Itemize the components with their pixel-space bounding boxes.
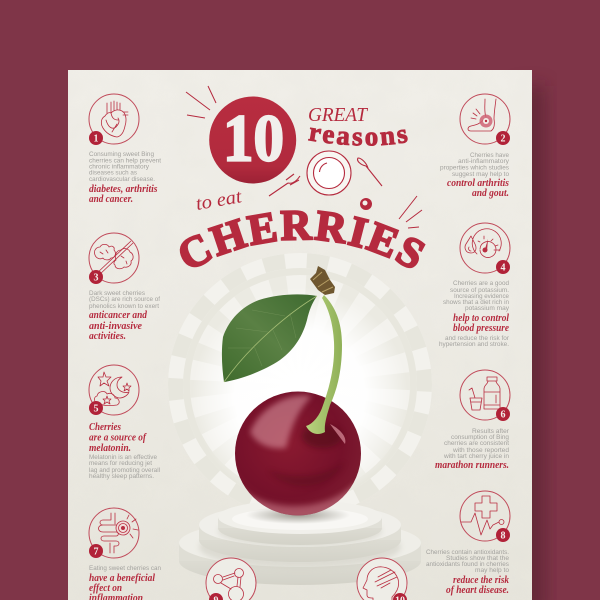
text: reason 5: healthy sleep patterns.	[89, 474, 154, 480]
text: reason 8: may help to	[475, 568, 510, 574]
accent strokes left of badge	[186, 86, 216, 118]
badge 3: 3	[94, 272, 98, 284]
leaf	[222, 294, 317, 382]
text: reason 2	[440, 153, 510, 199]
title badge 10	[209, 96, 296, 184]
heading: to eat: to eat	[194, 186, 244, 215]
text: reason 5: Cherries	[89, 421, 121, 433]
badge 2: 2	[500, 134, 506, 144]
badge 8: 8	[500, 530, 506, 542]
badge 4: 4	[500, 262, 506, 274]
text: reason 2: and gout.	[472, 187, 509, 199]
badge 7: 7	[94, 546, 98, 558]
rays	[190, 276, 410, 480]
poster paper background	[68, 70, 532, 600]
text: reason 4: and reduce the risk for	[445, 336, 509, 342]
text: reason 4: help to control	[453, 312, 510, 324]
badge 6: 6	[500, 410, 506, 420]
text: reason 3	[89, 291, 160, 342]
text: reason 5: Melatonin is an effective	[89, 455, 158, 461]
text: reason 1	[89, 152, 161, 205]
text: reason 6	[435, 429, 509, 471]
text: reason 5: are a source of	[89, 432, 147, 444]
text: reason 1: chronic inflammatory	[89, 164, 149, 170]
text: reason 8: reduce the risk	[453, 574, 509, 586]
icon: gauge and drop	[460, 223, 510, 273]
text: reason 2: control arthritis	[447, 177, 509, 189]
reason 6: juice	[435, 370, 510, 471]
text: reason 5: melatonin.	[89, 442, 131, 454]
reason 2: joint	[440, 94, 510, 199]
text: reason 4: Increasing evidence	[454, 294, 510, 300]
text: reason 1: diseases such as	[89, 170, 137, 176]
text: reason 3: (DSCs) are rich source of	[89, 297, 160, 303]
text: reason 8: Studies show that the	[446, 556, 510, 562]
reason 9: molecule	[206, 558, 256, 600]
text: reason 5: lag and promoting overall	[89, 468, 160, 474]
text: reason 8: Cherries contain antioxidants.	[426, 550, 509, 556]
reason 5: sleep	[89, 365, 160, 480]
badge 5: 5	[94, 404, 98, 414]
cherry highlights	[240, 395, 356, 520]
heading: reasons: reasons	[308, 127, 408, 146]
text: reason 4	[439, 281, 510, 348]
icon: knife	[358, 158, 382, 186]
text: reason 6: with tart cherry juice in	[443, 454, 509, 460]
outer ring blocks	[168, 254, 432, 504]
text: reason 8	[426, 550, 510, 596]
reason 10: brain	[357, 558, 407, 600]
text: reason 1: cherries can help prevent	[89, 158, 161, 164]
icon: intestines	[89, 508, 139, 558]
text: reason 4: blood pressure	[453, 322, 509, 334]
text: reason 4: shows that a diet rich in	[443, 300, 509, 306]
text: reason 2: Cherries have	[470, 153, 510, 159]
icon: bottle and glass	[460, 370, 510, 420]
text: reason 7	[89, 566, 161, 600]
text: reason 3: anticancer and	[89, 309, 147, 321]
reason 8: heart disease	[426, 491, 510, 596]
text: reason 6: consumption of Bing	[451, 435, 509, 441]
text: reason 8: of heart disease.	[446, 584, 509, 596]
text: reason 5	[89, 421, 160, 480]
text: reason 8: antioxidants found in cherries	[426, 562, 509, 568]
text: reason 6: Results after	[472, 429, 509, 435]
icon: fork	[269, 174, 300, 196]
reason 1: heart	[89, 94, 161, 205]
icon: moon and stars	[89, 365, 139, 415]
text: reason 2: anti-inflammatory	[458, 159, 509, 165]
poster shadow	[515, 86, 545, 600]
text: reason 3: Dark sweet cherries	[89, 291, 145, 297]
podium	[179, 500, 421, 585]
text: reason 7: effect on	[89, 582, 122, 594]
text: reason 6: with those reported	[452, 448, 509, 454]
text: reason 4: source of potassium.	[450, 288, 509, 294]
cherry with stem and leaf	[222, 266, 361, 520]
title badge 10: 10	[223, 102, 284, 176]
icon: heart	[89, 94, 139, 144]
text: reason 6: marathon runners.	[435, 459, 509, 471]
text: reason 7: Eating sweet cherries can	[89, 566, 161, 572]
badge 1: 1	[94, 134, 98, 144]
icon: plate	[307, 151, 351, 195]
text: reason 4: hypertension and stroke.	[439, 342, 509, 348]
reason 7: inflammation	[89, 508, 161, 600]
text: reason 1: Consuming sweet Bing	[89, 152, 154, 158]
stem	[306, 295, 342, 434]
text: reason 7: have a beneficial	[89, 572, 156, 584]
heading: GREAT: GREAT	[308, 105, 368, 126]
text: reason 2: properties which studies	[440, 166, 509, 172]
accent strokes right of title	[399, 196, 422, 228]
icon: molecule	[206, 558, 256, 600]
text: reason 3: activities.	[89, 330, 126, 342]
icon: head	[357, 558, 407, 600]
stem tip	[310, 266, 335, 295]
icon: crossed cells	[89, 233, 139, 283]
sunburst backdrop	[168, 253, 432, 504]
text: reason 4: potassium may	[465, 306, 509, 312]
infographic poster	[68, 70, 550, 600]
text: reason 1: and cancer.	[89, 193, 133, 205]
icon: medical cross and pulse	[460, 491, 510, 541]
icon: foot	[460, 94, 510, 144]
text: reason 6: cherries are consistent	[444, 441, 509, 447]
text: reason 3: anti-invasive	[89, 320, 142, 332]
heading: CHERRIES: CHERRIES	[180, 210, 426, 268]
text: reason 4: Cherries are a good	[453, 281, 509, 287]
text: reason 3: phenolics known to exert	[89, 304, 159, 310]
text: reason 1: cardiovascular disease.	[89, 177, 155, 183]
text: reason 5: means for reducing jet	[89, 461, 152, 467]
cherry body	[235, 392, 361, 516]
text: reason 2: suggest may help to	[452, 172, 510, 178]
reason 4: blood pressure	[439, 223, 510, 348]
reason 3: cancer cells	[89, 233, 160, 342]
text: reason 1: diabetes, arthritis	[89, 183, 158, 195]
